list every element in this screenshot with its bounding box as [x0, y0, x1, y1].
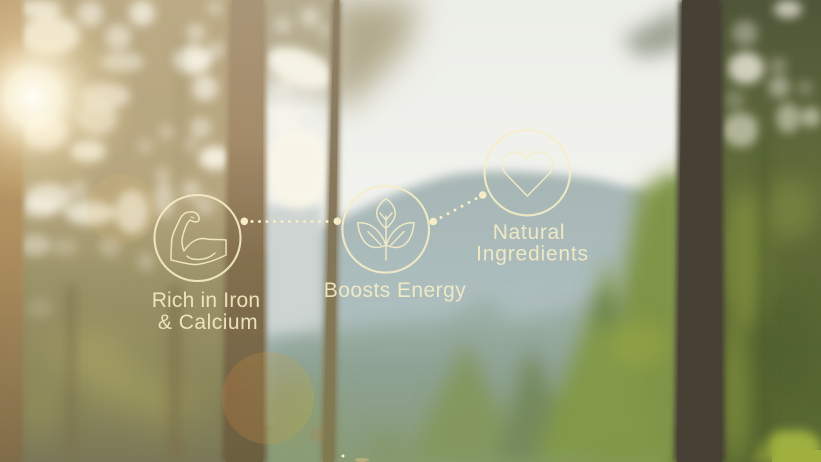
lens flares — [87, 174, 157, 244]
label: Boosts Energy: Boosts Energy — [324, 279, 466, 302]
label: Rich in Iron & Calcium: Rich in Iron — [152, 289, 260, 312]
icon: leaf sprout — [342, 186, 429, 273]
bright bush — [756, 430, 821, 462]
dotted connector 2 — [430, 191, 487, 225]
dotted connector 1 — [240, 217, 341, 225]
label: Natural Ingredients: Ingredients — [476, 242, 589, 266]
icon: flexed bicep — [154, 195, 240, 281]
right foliage — [700, 0, 821, 462]
faint rear trunks — [65, 40, 770, 462]
green foliage between lower trees — [20, 329, 327, 460]
sun glow — [0, 0, 138, 202]
upper canopy between trunks — [262, 0, 340, 110]
feature: Boosts Energy — [324, 186, 466, 302]
bottom strip base — [0, 425, 821, 462]
branches left of right trunk — [622, 5, 685, 58]
bokeh highlights — [18, 0, 821, 318]
left foliage — [0, 0, 256, 462]
tree trunks — [0, 0, 20, 462]
icon: heart — [485, 130, 570, 215]
label: Natural Ingredients: Natural — [493, 221, 565, 244]
feature: Natural Ingredients — [476, 130, 589, 266]
distant forest — [262, 280, 660, 462]
foreground firs — [362, 180, 816, 462]
pale haze left of mountain — [262, 205, 322, 335]
mountain — [250, 171, 660, 462]
feature: Rich in Iron & Calcium — [152, 195, 260, 334]
label: Rich in Iron & Calcium: & Calcium — [158, 311, 258, 334]
